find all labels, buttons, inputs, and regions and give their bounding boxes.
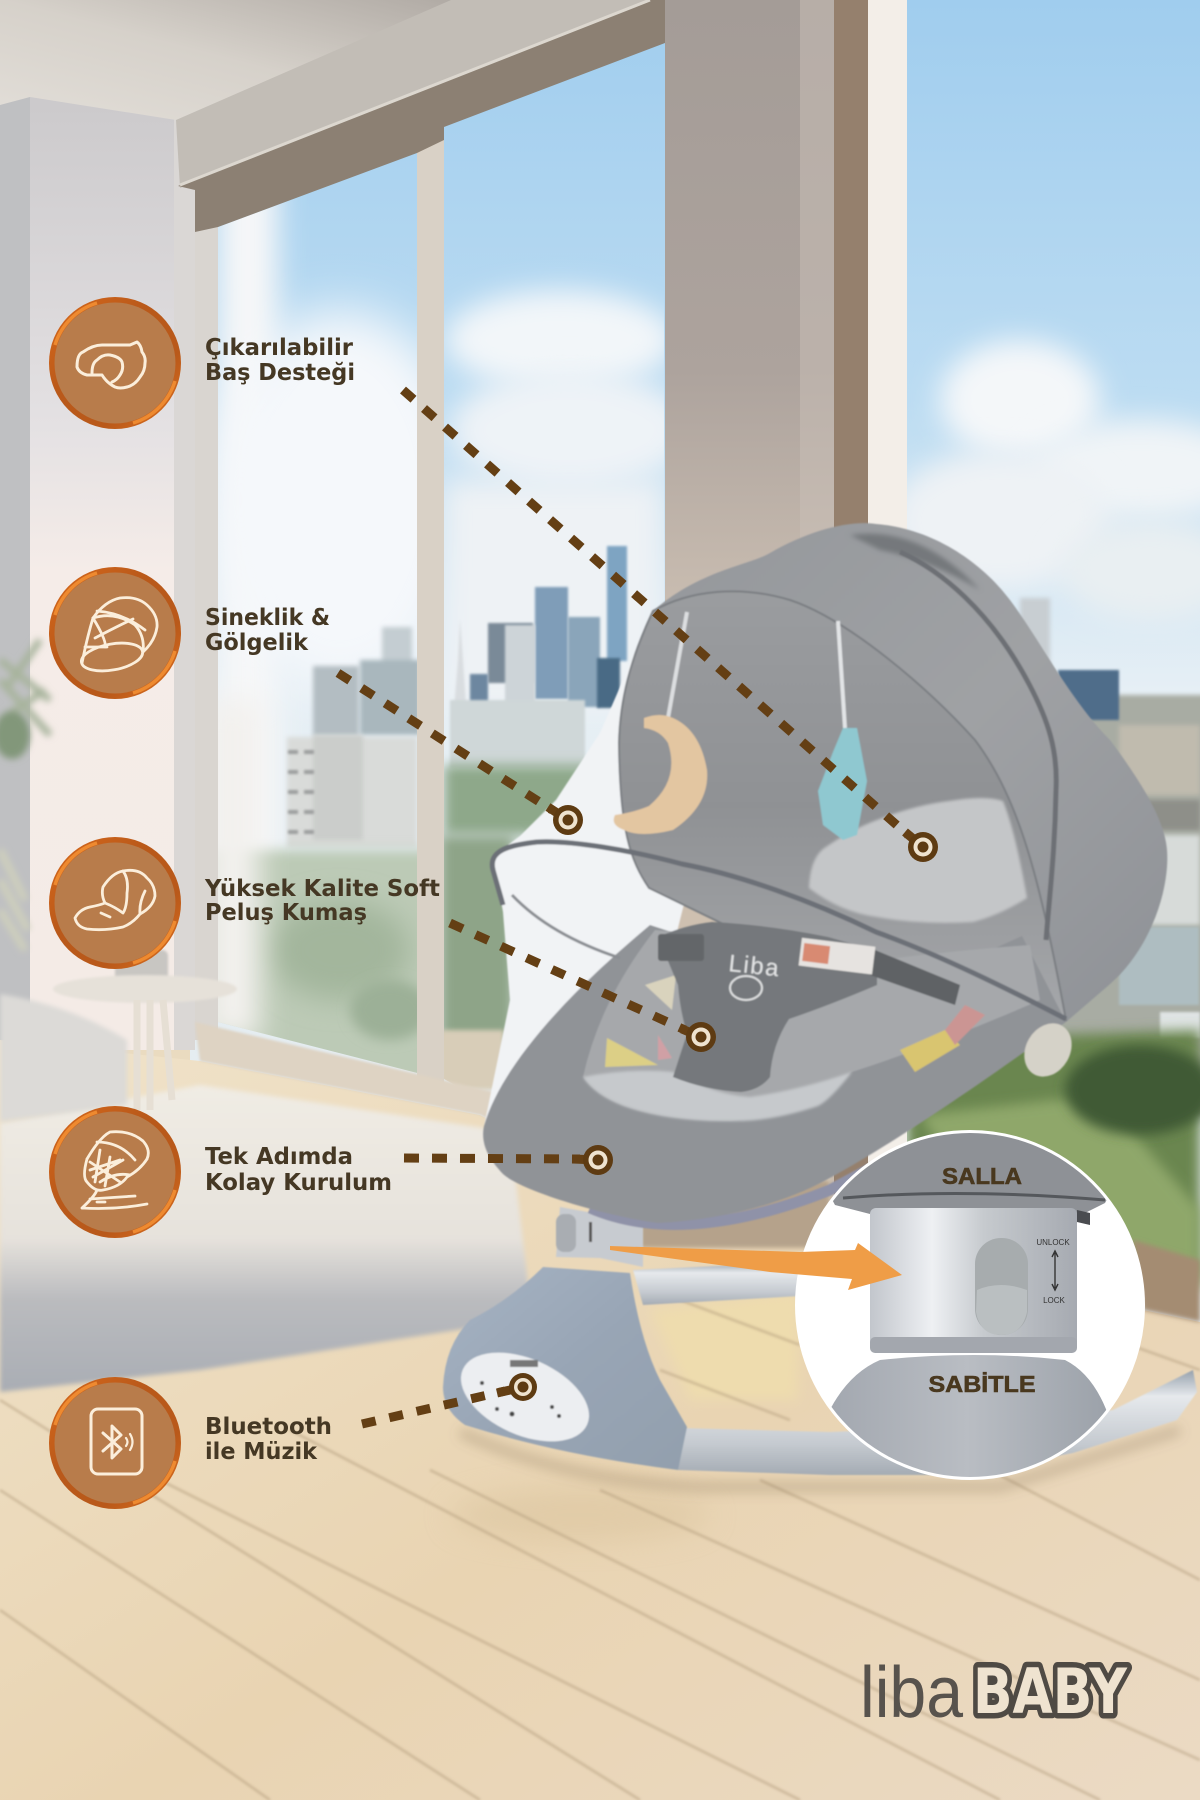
callout line: bluetooth bbox=[362, 1387, 523, 1424]
chair: lower rail bbox=[678, 1370, 1197, 1475]
background: outside view right bbox=[890, 340, 1200, 1290]
chair: harness bbox=[658, 922, 877, 1092]
label: tek adımda kolay kurulum: Kolay Kurulum bbox=[205, 1170, 392, 1196]
label: bluetooth ile müzik bbox=[205, 1414, 332, 1465]
inset: salla label: SALLA bbox=[942, 1163, 1022, 1189]
inset: slider button bbox=[975, 1238, 1028, 1335]
label: tek adımda kolay kurulum: Tek Adımda bbox=[205, 1144, 353, 1170]
chair: canopy seam line bbox=[900, 552, 1056, 940]
inset: cloth and mechanism bbox=[832, 1133, 1106, 1477]
icon: head support bbox=[49, 297, 181, 429]
chair: moon toy bbox=[614, 612, 707, 834]
inset: unlock text: UNLOCK bbox=[1036, 1238, 1070, 1247]
callout line: sineklik bbox=[338, 673, 568, 820]
chair: colour patches bbox=[605, 975, 985, 1072]
chair: buckle strap bbox=[658, 934, 704, 961]
chair: seat inner bbox=[583, 930, 1040, 1121]
target marker 2 bbox=[553, 805, 583, 835]
chair: brand text: Liba bbox=[727, 950, 781, 982]
chair: seat cushion bbox=[583, 1071, 852, 1121]
chair: floor shadow bbox=[460, 1430, 1180, 1487]
icon: easy setup bbox=[49, 1106, 181, 1238]
background: window baseboard bbox=[195, 1022, 830, 1248]
target marker 3 bbox=[686, 1022, 716, 1052]
chair: net ring bbox=[492, 842, 1066, 1019]
chair: white mesh net bbox=[484, 611, 720, 1126]
background: plant bbox=[0, 640, 50, 950]
logo: liba baby bbox=[860, 1653, 1128, 1733]
chair: seat bowl bbox=[483, 925, 1066, 1223]
inset: sabitle label: SABİTLE bbox=[928, 1371, 1036, 1397]
label: çıkarılabilir baş desteği: Çıkarılabilir bbox=[205, 335, 354, 361]
callout line: kumaş bbox=[450, 923, 701, 1037]
label: çıkarılabilir baş desteği bbox=[205, 335, 355, 386]
label: bluetooth ile müzik: ile Müzik bbox=[205, 1439, 318, 1465]
background: ceiling, beam and window head bbox=[0, 0, 668, 232]
callout line: baş desteği bbox=[403, 390, 923, 847]
chair: canopy shell bbox=[653, 523, 1167, 1022]
logo: liba baby: liba bbox=[860, 1653, 964, 1733]
chair: emblem bbox=[730, 976, 762, 1000]
background: left wall bbox=[0, 90, 195, 1050]
chair: upper rail bbox=[633, 1262, 800, 1305]
background: sofa bbox=[0, 994, 127, 1122]
chair: right strap bbox=[870, 950, 960, 1005]
orange arrow bbox=[610, 1243, 902, 1290]
background: window sky bbox=[190, 0, 1200, 1330]
chair: control panel bbox=[447, 1335, 603, 1459]
target marker 5 bbox=[509, 1373, 537, 1401]
inset circle: lock detail bbox=[790, 1120, 1150, 1480]
label: sineklik gölgelik: Sineklik & bbox=[205, 605, 330, 631]
chair: blue star toy bbox=[818, 621, 867, 840]
inset: lock text: LOCK bbox=[1043, 1296, 1066, 1305]
background: clouds and skyline through left glass bbox=[218, 199, 417, 1073]
chair: scalloped underside bbox=[590, 1150, 905, 1224]
inset: base dome bbox=[825, 1355, 1110, 1480]
callout line: kurulum bbox=[404, 1158, 598, 1160]
label: tek adımda kolay kurulum bbox=[205, 1144, 392, 1196]
background: clouds and skyline through middle glass bbox=[444, 276, 664, 1091]
background: tan wall under the seat bbox=[640, 1180, 830, 1248]
background: brown ledge right bbox=[1133, 1240, 1200, 1322]
icon: bluetooth bbox=[49, 1377, 181, 1509]
background: window frame posts bbox=[195, 130, 444, 1090]
background: pillar and frame bbox=[665, 0, 907, 1240]
chair: canopy interior bbox=[619, 591, 1066, 1020]
label: sineklik gölgelik: Gölgelik bbox=[205, 630, 309, 656]
chair: fabric label bbox=[799, 938, 875, 975]
inset: lock arrow bbox=[1052, 1251, 1058, 1290]
logo: liba baby: BABY bbox=[973, 1655, 1128, 1728]
label: yüksek kalite soft peluş kumaş: Peluş Kumaş bbox=[205, 900, 367, 926]
chair: dark canopy top patches bbox=[850, 534, 980, 590]
chair: neck swivel bbox=[556, 1207, 643, 1267]
label: yüksek kalite soft peluş kumaş: Yüksek Kalite Soft bbox=[204, 876, 440, 902]
label: yüksek kalite soft peluş kumaş bbox=[204, 876, 440, 926]
background: rug bbox=[0, 1085, 530, 1392]
chair: headrest bbox=[809, 798, 1027, 923]
chair: side hub bbox=[1015, 1015, 1081, 1085]
label: bluetooth ile müzik: Bluetooth bbox=[205, 1414, 332, 1440]
chair: inner net ring bbox=[512, 895, 620, 958]
icon: soft fabric bbox=[49, 837, 181, 969]
background: side table bbox=[53, 950, 237, 1110]
label: sineklik gölgelik bbox=[205, 605, 330, 656]
label: çıkarılabilir baş desteği: Baş Desteği bbox=[205, 360, 355, 386]
background: wooden floor bbox=[0, 1040, 1200, 1800]
baby swing chair bbox=[443, 523, 1197, 1487]
target marker 4 bbox=[583, 1145, 613, 1175]
icon: net and canopy bbox=[49, 567, 181, 699]
chair: pedestal base bbox=[443, 1267, 687, 1470]
target marker 1 bbox=[908, 832, 938, 862]
